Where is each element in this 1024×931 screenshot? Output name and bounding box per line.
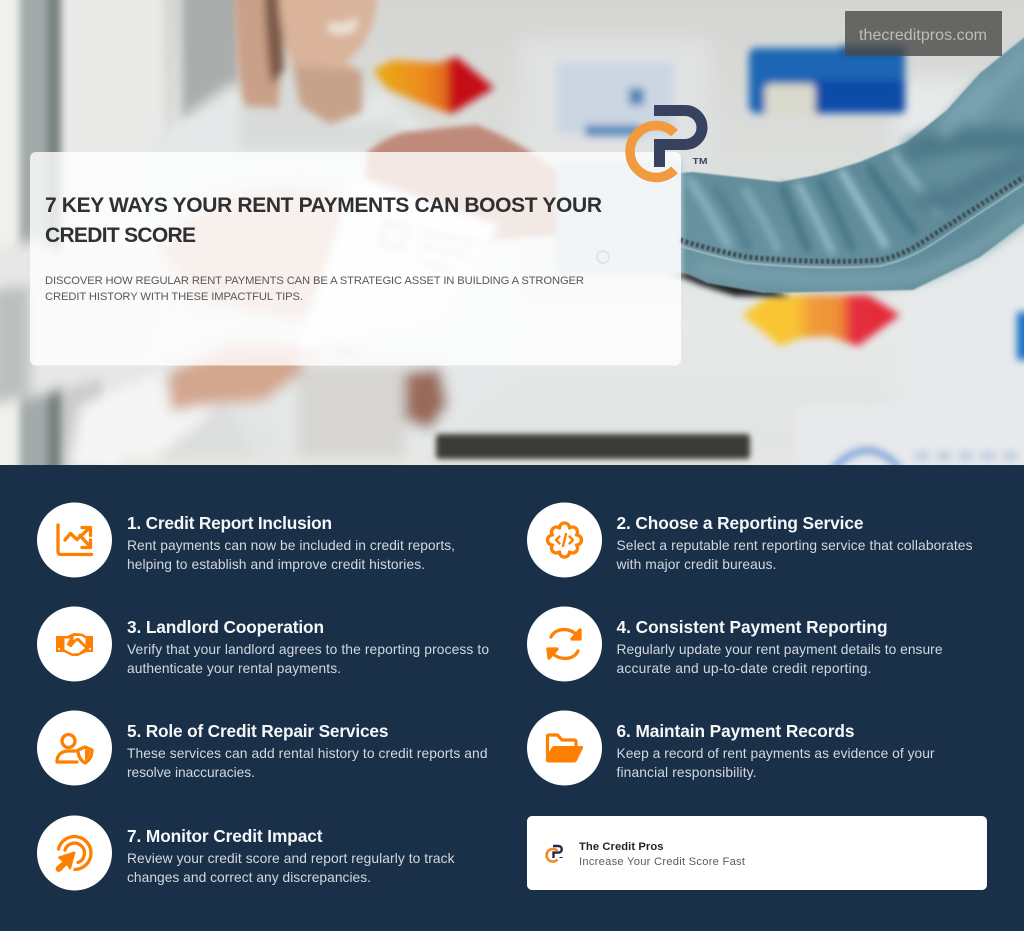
title panel (30, 152, 681, 366)
item 6: maintain payment records: 6. Maintain Payment Records (616, 721, 854, 741)
item 4: consistent payment reporting (527, 606, 943, 682)
item 7: monitor credit impact: 7. Monitor Credit Impact (127, 826, 323, 846)
item 3: landlord cooperation: authenticate your rental payments. (127, 661, 341, 676)
brand card (527, 816, 987, 890)
blouse (166, 78, 454, 436)
item 4: consistent payment reporting: 4. Consistent Payment Reporting (616, 617, 888, 637)
subtitle: DISCOVER HOW REGULAR RENT PAYMENTS CAN BE A STRATEGIC ASSET IN BUILDING A STRONGER (45, 275, 584, 287)
title: 7 KEY WAYS YOUR RENT PAYMENTS CAN BOOST YOUR (45, 194, 602, 217)
bottom right logo (795, 407, 1024, 477)
hand in panel (166, 191, 340, 316)
item 5: role of credit repair services (37, 710, 488, 786)
item 1: credit report inclusion: 1. Credit Report Inclusion (127, 513, 332, 533)
yellow-red arrow (742, 295, 900, 346)
brand card: Increase Your Credit Score Fast (579, 856, 746, 868)
upper hand (365, 125, 565, 240)
item 2: choose a reporting service (527, 502, 973, 578)
icon: handshake (56, 633, 93, 656)
receipt paper (318, 178, 499, 299)
hero photo background (0, 0, 1024, 480)
item 3: landlord cooperation (37, 606, 489, 682)
dark object on table (436, 434, 750, 459)
item 4: consistent payment reporting: Regularly update your rent payment details to ensure (616, 642, 943, 657)
item 7: monitor credit impact: changes and correct any discrepancies. (127, 870, 371, 885)
navy section background (0, 465, 1024, 931)
icon: refresh arrows (548, 630, 580, 658)
title (45, 194, 602, 247)
man's sleeve left (0, 234, 104, 404)
pale blue card (556, 62, 674, 134)
icon: folder (546, 735, 583, 762)
item 2: choose a reporting service: 2. Choose a Reporting Service (616, 513, 864, 533)
icon: chart (58, 525, 92, 554)
item 7: monitor credit impact: Review your credit score and report regularly to track (127, 851, 455, 866)
item 3: landlord cooperation: 3. Landlord Cooperation (127, 617, 324, 637)
icon: target with arrow (57, 837, 91, 871)
item 7: monitor credit impact (37, 816, 455, 890)
logo: CP mark: TM (692, 157, 708, 166)
other hand, lower (168, 345, 303, 412)
item 2: choose a reporting service: Select a reputable rent reporting service that collaborates (616, 538, 973, 553)
lower white sleeve (68, 372, 240, 470)
subtitle (45, 275, 584, 303)
brand card: The Credit Pros (579, 841, 664, 853)
denim arm (556, 36, 1024, 297)
website badge: thecreditpros.com (859, 27, 987, 44)
title: CREDIT SCORE (45, 224, 196, 247)
item 1: credit report inclusion (37, 502, 455, 578)
icon: gear with code (548, 523, 582, 557)
item 5: role of credit repair services: These services can add rental history to credit reports and (127, 746, 488, 761)
website badge (845, 11, 1002, 56)
hair and face (233, 0, 282, 108)
cuff button (597, 251, 609, 263)
item 5: role of credit repair services: resolve inaccuracies. (127, 765, 255, 780)
logo: CP mark (630, 110, 708, 178)
item 6: maintain payment records: Keep a record of rent payments as evidence of your (616, 746, 935, 761)
blue card (749, 48, 905, 113)
item 6: maintain payment records (527, 710, 935, 786)
subtitle: CREDIT HISTORY WITH THESE IMPACTFUL TIPS. (45, 291, 303, 303)
item 2: choose a reporting service: with major credit bureaus. (616, 557, 776, 572)
item 1: credit report inclusion: Rent payments can now be included in credit reports, (127, 538, 455, 553)
table (120, 458, 800, 470)
denim stitching (680, 177, 1024, 261)
item 3: landlord cooperation: Verify that your landlord agrees to the reporting process to (127, 642, 489, 657)
red arrow (373, 57, 494, 114)
item 5: role of credit repair services: 5. Role of Credit Repair Services (127, 721, 388, 741)
paper footer marks (290, 350, 358, 357)
icon: person with shield (57, 734, 92, 763)
item 4: consistent payment reporting: accurate and up-to-date credit reporting. (616, 661, 872, 676)
item 1: credit report inclusion: helping to establish and improve credit histories. (127, 557, 425, 572)
pale cuff under panel (556, 160, 682, 275)
right blue edge (1017, 312, 1024, 360)
icon: small CP logo (547, 846, 562, 862)
item 6: maintain payment records: financial responsibility. (616, 765, 756, 780)
